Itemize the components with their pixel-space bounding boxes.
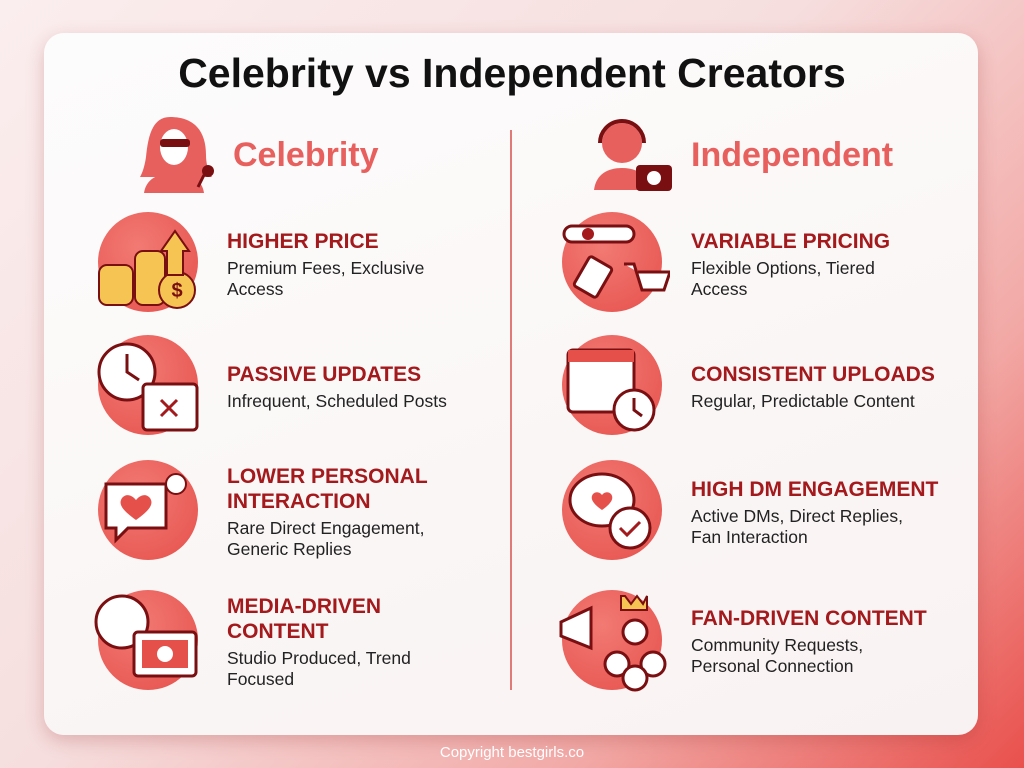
divider	[510, 130, 512, 690]
left item 2	[227, 363, 447, 411]
left item 1 icon	[98, 212, 198, 312]
calendar glyph	[566, 348, 656, 432]
right item 2 icon	[562, 335, 662, 435]
right item 2	[691, 363, 935, 411]
left item 1	[227, 230, 424, 299]
left item 1: Premium Fees, Exclusive Access	[227, 258, 424, 299]
bubbles glyph	[568, 472, 652, 550]
footer: Copyright bestgirls.co	[440, 744, 584, 761]
heading: Celebrity: Celebrity	[233, 136, 378, 174]
film & tv glyph	[94, 594, 198, 678]
right item 1: VARIABLE PRICING	[691, 230, 890, 253]
right item 1	[691, 230, 890, 299]
left item 1: HIGHER PRICE	[227, 230, 379, 253]
left item 4 icon	[98, 590, 198, 690]
left item 2 icon	[98, 335, 198, 435]
left item 4: Studio Produced, Trend Focused	[227, 648, 411, 689]
slider & cart glyph	[562, 224, 670, 299]
coins glyph	[98, 229, 196, 309]
right item 2: CONSISTENT UPLOADS	[691, 363, 935, 386]
left item 3: Rare Direct Engagement, Generic Replies	[227, 518, 424, 559]
left item 3	[227, 465, 428, 559]
title: Celebrity vs Independent Creators	[178, 50, 846, 96]
right item 3: HIGH DM ENGAGEMENT	[691, 478, 938, 501]
left item 4: MEDIA-DRIVEN CONTENT	[227, 595, 381, 643]
coins glyph: $	[171, 280, 183, 302]
right item 3: Active DMs, Direct Replies, Fan Interaction	[691, 506, 903, 547]
right item 3 icon	[562, 460, 662, 560]
left item 2: Infrequent, Scheduled Posts	[227, 391, 447, 411]
clock glyph	[98, 342, 198, 432]
left item 4	[227, 595, 411, 689]
right item 4: Personal Connection	[691, 656, 853, 676]
right item 1 icon	[562, 212, 662, 312]
left item 3 icon	[98, 460, 198, 560]
icon: celebrity	[140, 117, 214, 193]
right item 4 icon	[562, 590, 662, 690]
chat glyph	[104, 473, 187, 544]
megaphone & fans glyph	[560, 594, 666, 692]
right item 2: Regular, Predictable Content	[691, 391, 915, 411]
right item 1: Flexible Options, Tiered Access	[691, 258, 875, 299]
right item 4	[691, 607, 927, 676]
left item 2: PASSIVE UPDATES	[227, 363, 421, 386]
right item 3	[691, 478, 938, 547]
icon: independent	[594, 119, 672, 191]
heading: Independent: Independent	[691, 136, 893, 174]
right item 4: Community Requests,	[691, 635, 863, 655]
left item 3: LOWER PERSONAL INTERACTION	[227, 465, 427, 513]
right item 4: FAN-DRIVEN CONTENT	[691, 607, 927, 630]
